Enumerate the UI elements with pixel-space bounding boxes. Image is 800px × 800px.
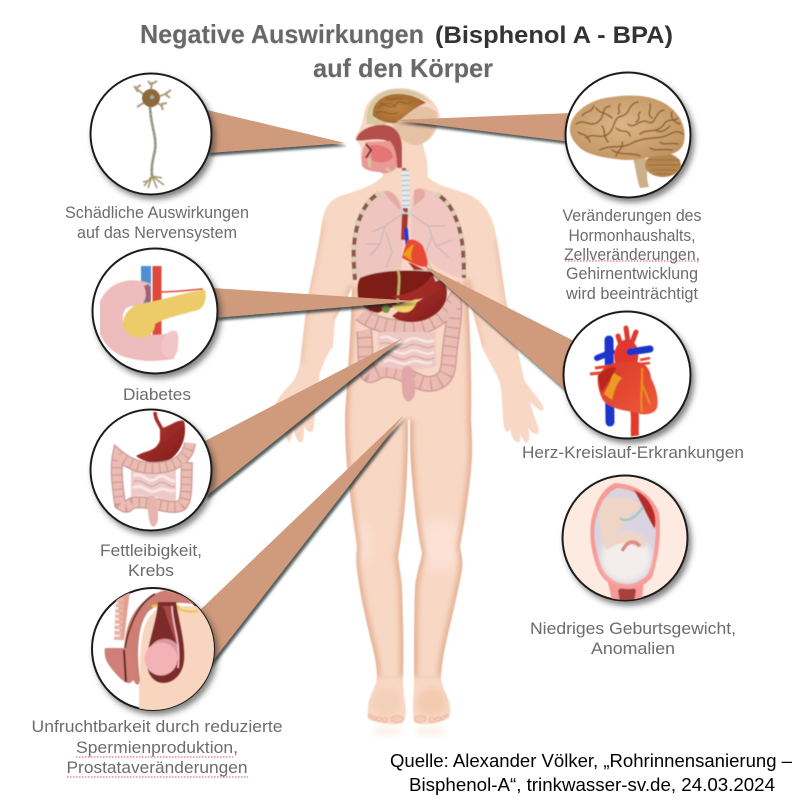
- title line one: Negative Auswirkungen: [140, 19, 424, 49]
- nasal cavity: [356, 125, 402, 168]
- pancreas: [392, 299, 418, 312]
- large intestine: [361, 302, 454, 384]
- label: hormone changes: Gehirnentwicklung: [566, 264, 698, 283]
- small intestine: [378, 332, 436, 370]
- arrow: pancreas to diabetes: [212, 288, 417, 318]
- label: nervous system: auf das Nervensystem: [77, 223, 237, 242]
- label: infertility: Spermienproduktion,: [76, 738, 238, 757]
- left lung: [353, 191, 403, 280]
- label: infertility: Unfruchtbarkeit durch reduzierte: [32, 717, 282, 736]
- title chemical name: (Bisphenol A - BPA): [435, 22, 673, 49]
- label: obesity and cancer: Krebs: [128, 561, 174, 580]
- arrow: heart to cardiovascular: [423, 265, 578, 394]
- label: hormone changes: Zellveränderungen,: [564, 245, 700, 264]
- arrow: lower body to infertility: [198, 415, 404, 667]
- title: [140, 19, 673, 83]
- panel: brain: [566, 72, 690, 198]
- lungs: [353, 188, 465, 280]
- circle: [566, 72, 690, 198]
- rectum: [402, 366, 415, 402]
- icon: fetus in womb: [590, 483, 660, 602]
- head cross-section: [356, 89, 437, 173]
- circle: [90, 410, 212, 530]
- label: infertility: Prostataveränderungen: [66, 758, 248, 777]
- icon: neuron: [134, 81, 171, 188]
- source credit: Bisphenol-A“, trinkwasser-sv.de, 24.03.2024: [409, 775, 775, 795]
- icon: brain: [570, 95, 685, 188]
- rib beads left: [354, 194, 378, 280]
- panel: intestines: [90, 410, 212, 530]
- brain: [373, 94, 426, 123]
- skin silhouette: [275, 88, 544, 725]
- icon: testis cross-section: [104, 590, 214, 710]
- floor reflection of the feet: [372, 725, 446, 737]
- label: low birth weight: Niedriges Geburtsgewicht,: [530, 619, 736, 638]
- source credit: [390, 751, 792, 795]
- circle: [564, 312, 690, 438]
- translucent cerebrum area: [392, 106, 437, 145]
- mouth and tongue: [362, 141, 397, 173]
- trachea: [400, 168, 412, 252]
- panel: nerve cell: [90, 74, 212, 194]
- circle: [92, 588, 214, 710]
- icon: heart: [590, 328, 658, 436]
- rib beads right: [438, 195, 464, 278]
- circle: [90, 74, 212, 194]
- label: obesity and cancer: [100, 541, 202, 580]
- panel: pancreas: [92, 248, 218, 374]
- skull band: [367, 89, 432, 126]
- circle: [562, 476, 688, 600]
- label: infertility: [32, 717, 282, 777]
- label: cardiovascular disease: Herz-Kreislauf-Erkrankungen: [522, 443, 744, 462]
- icon: digestive tract: [117, 412, 190, 527]
- toes: [368, 714, 449, 722]
- human body figure: [275, 88, 544, 737]
- label: nervous system: Schädliche Auswirkungen: [65, 203, 249, 222]
- label: hormone changes: Veränderungen des: [562, 206, 702, 225]
- label: obesity and cancer: Fettleibigkeit,: [100, 541, 202, 560]
- liver: [357, 270, 434, 313]
- label: hormone changes: wird beeinträchtigt: [565, 284, 698, 303]
- title line two: auf den Körper: [313, 53, 493, 83]
- circle: [92, 248, 218, 374]
- panel: fetus: [562, 476, 688, 602]
- label: diabetes: Diabetes: [123, 385, 191, 404]
- label: hormone changes: [562, 206, 702, 303]
- icon: pancreas and duodenum: [110, 266, 206, 358]
- arrow: intestines to obesity: [205, 338, 403, 497]
- right lung: [411, 188, 465, 278]
- label: hormone changes: Hormonhaushalts,: [568, 226, 696, 245]
- gallbladder: [382, 270, 399, 313]
- panel: heart: [564, 312, 690, 438]
- label: low birth weight: [530, 619, 736, 658]
- source credit: Quelle: Alexander Völker, „Rohrinnensanierung –: [390, 751, 792, 771]
- label: low birth weight: Anomalien: [591, 639, 675, 658]
- arrow: brain to hormone changes: [395, 113, 572, 142]
- stomach: [392, 280, 447, 322]
- heart: [402, 239, 428, 270]
- panel: male reproductive organs: [92, 588, 220, 720]
- arrow: head to nervous system: [207, 110, 345, 153]
- label: nervous system: [65, 203, 249, 242]
